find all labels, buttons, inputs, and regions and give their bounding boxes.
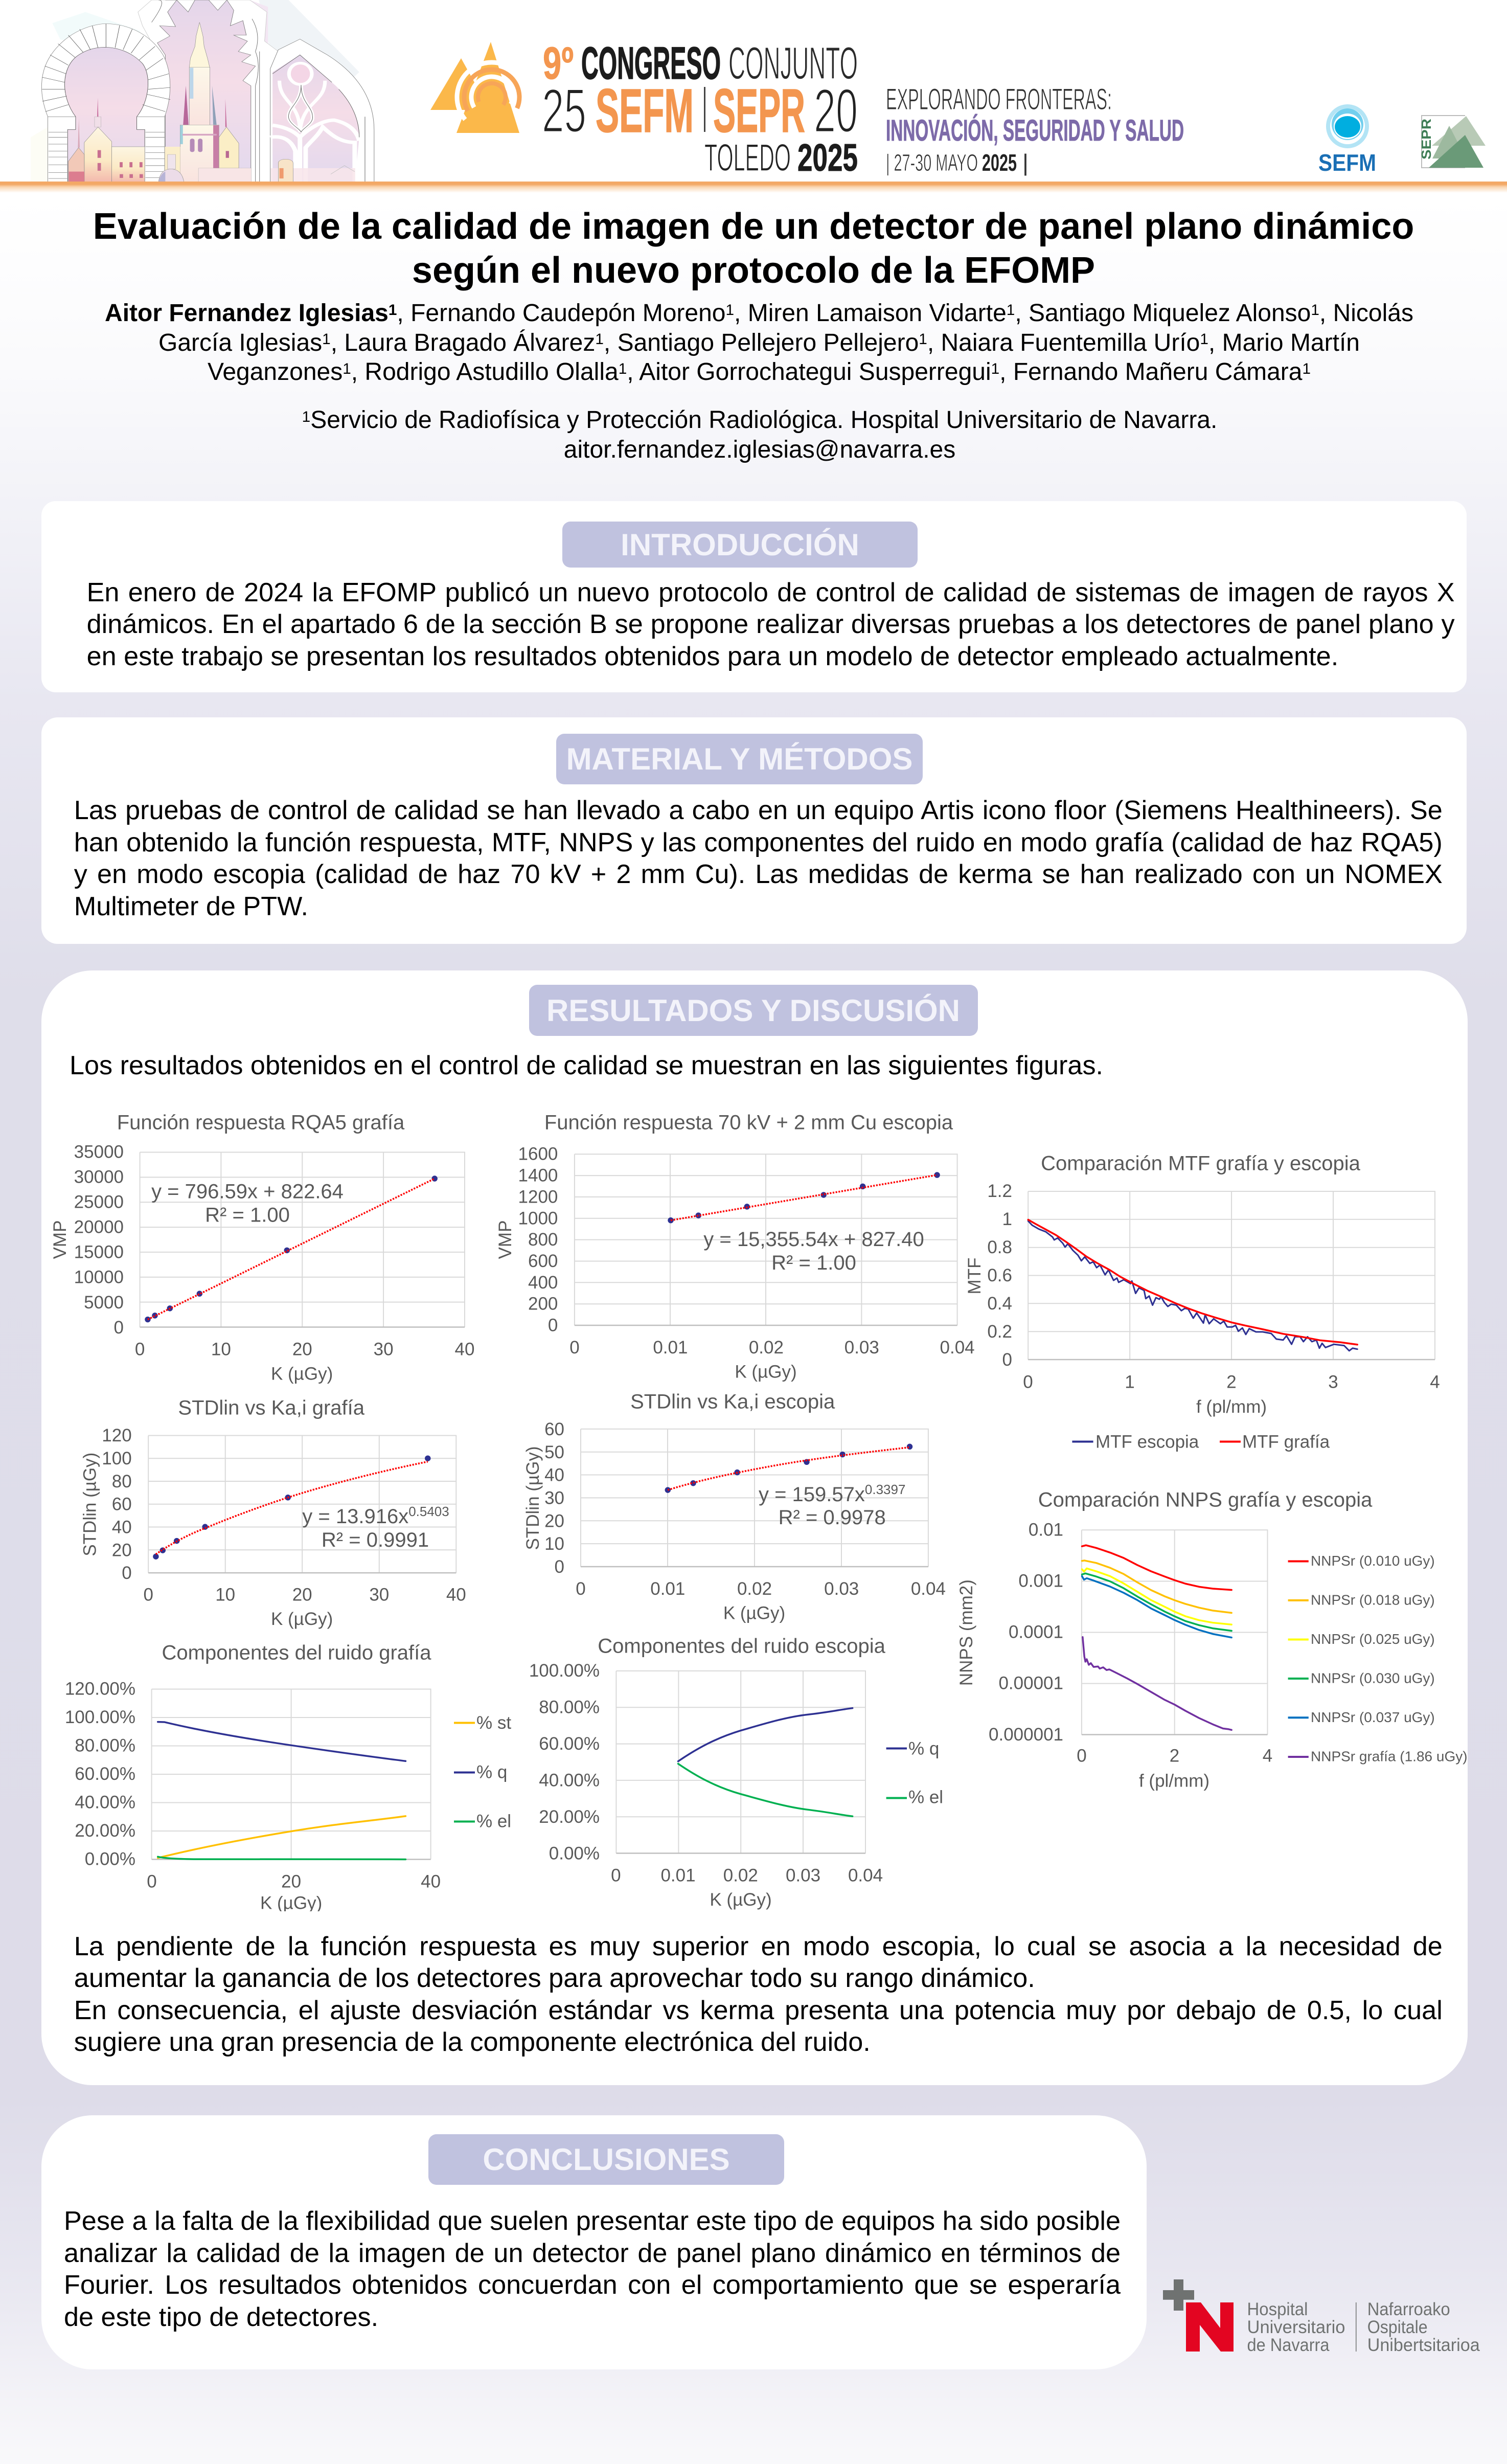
heading: conclusiones: CONCLUSIONES	[483, 2142, 730, 2177]
chart: Comparación NNPS grafía y escopia: f (pl/mm)	[1139, 1771, 1209, 1791]
chart: Función respuesta 70 kV + 2 mm Cu escopia: 1400	[518, 1165, 558, 1185]
chart: Función respuesta 70 kV + 2 mm Cu escopia: K (µGy)	[735, 1362, 797, 1382]
logo: Hospital Universitario de Navarra	[1163, 2279, 1480, 2355]
panel: conclusiones	[41, 2115, 1147, 2369]
chart: STDlin vs Ka,i escopia: 0.03	[824, 1578, 859, 1598]
text: material y métodos: Las pruebas de control de calidad se han llevado a cabo en un equipo Artis icono floor (Siemens Healthineers). Se	[74, 796, 1443, 825]
chart: STDlin vs Ka,i escopia: 50	[544, 1442, 564, 1462]
heading: introducción: INTRODUCCIÓN	[621, 528, 859, 562]
chart: STDlin vs Ka,i grafía: 0	[122, 1563, 132, 1583]
header banner	[0, 0, 1507, 192]
chart: STDlin vs Ka,i escopia: K (µGy)	[723, 1603, 785, 1623]
text: conclusiones: analizar la calidad de la imagen de un detector de panel plano dinámico en términos de	[64, 2239, 1121, 2268]
logo: Hospital Universitario de Navarra: Ospitale	[1367, 2317, 1428, 2337]
chart: Componentes del ruido grafía	[65, 1641, 511, 1913]
chart: Función respuesta 70 kV + 2 mm Cu escopia: VMP	[495, 1220, 515, 1259]
chart: STDlin vs Ka,i grafía: R² = 0.9991	[322, 1529, 429, 1551]
charts area	[50, 1111, 1468, 1911]
chart: Comparación NNPS grafía y escopia	[956, 1488, 1468, 1791]
chart: Función respuesta RQA5 grafía: 25000	[74, 1192, 124, 1212]
chart: STDlin vs Ka,i grafía: 20	[292, 1585, 312, 1604]
text: conclusiones: de este tipo de detectores.	[64, 2302, 378, 2332]
chart: STDlin vs Ka,i escopia: 40	[544, 1465, 564, 1485]
chart: STDlin vs Ka,i grafía: STDlin (µGy)	[80, 1452, 100, 1556]
orange header rule	[0, 182, 1507, 193]
chart: Comparación MTF grafía y escopia: Comparación MTF grafía y escopia	[1041, 1152, 1361, 1174]
chart: Función respuesta 70 kV + 2 mm Cu escopia: 600	[528, 1251, 558, 1271]
text: resultados discussion: sugiere una gran presencia de la componente electrónica del ruido.	[74, 2027, 871, 2057]
congress motto: INNOVACIÓN, SEGURIDAD Y SALUD	[886, 114, 1184, 147]
chart: Comparación MTF grafía y escopia: 0.6	[987, 1265, 1012, 1285]
congress motto: EXPLORANDO FRONTERAS:	[886, 83, 1112, 116]
text: material y métodos: Multimeter de PTW.	[74, 892, 308, 921]
chart: Comparación MTF grafía y escopia: MTF escopia	[1095, 1432, 1199, 1452]
logo: SEFM	[1318, 104, 1376, 176]
chart: Componentes del ruido escopia: 0.00%	[549, 1843, 600, 1863]
chart: STDlin vs Ka,i escopia: STDlin vs Ka,i escopia	[630, 1390, 835, 1413]
chart: STDlin vs Ka,i escopia: 60	[544, 1419, 564, 1439]
congress logo mark	[430, 42, 541, 146]
logo: Hospital Universitario de Navarra: Hospital	[1247, 2299, 1308, 2319]
chart: Comparación NNPS grafía y escopia: NNPSr (0.010 uGy)	[1311, 1553, 1435, 1569]
chart: STDlin vs Ka,i escopia: 0	[555, 1557, 564, 1577]
chart: STDlin vs Ka,i grafía: 30	[369, 1585, 389, 1604]
chart: Componentes del ruido grafía: % el	[476, 1811, 511, 1831]
authors: García Iglesias1, Laura Bragado Álvarez1, Santiago Pellejero Pellejero1, Naiara Fuentemilla Urío1, Mario Martín	[158, 329, 1360, 356]
authors: Aitor Fernandez Iglesias1, Fernando Caudepón Moreno1, Miren Lamaison Vidarte1, Santiago Miquelez Alonso1, Nicolás	[105, 300, 1413, 327]
text: material y métodos: han obtenido la función respuesta, MTF, NNPS y las componentes del ruido en modo grafía (calidad de haz RQA5)	[74, 828, 1443, 857]
authors: Veganzones1, Rodrigo Astudillo Olalla1, Aitor Gorrochategui Susperregui1, Fernando Mañeru Cámara1	[208, 358, 1311, 386]
chart: Comparación MTF grafía y escopia: MTF grafía	[1242, 1432, 1330, 1452]
chart: Componentes del ruido grafía: 0	[147, 1871, 157, 1891]
chart: Comparación NNPS grafía y escopia: 0.00001	[998, 1673, 1063, 1693]
chart: STDlin vs Ka,i grafía: 40	[446, 1585, 466, 1604]
chart: Componentes del ruido grafía: 0.00%	[85, 1849, 135, 1869]
chart: STDlin vs Ka,i escopia: y = 159.57x	[759, 1483, 865, 1505]
title: Evaluación de la calidad de imagen de un detector de panel plano dinámico	[93, 206, 1414, 247]
chart: Componentes del ruido grafía: 40.00%	[75, 1792, 135, 1812]
chart: Comparación MTF grafía y escopia: 3	[1328, 1372, 1338, 1392]
chart: STDlin vs Ka,i grafía: y = 13.916x	[302, 1505, 408, 1528]
chart: Comparación NNPS grafía y escopia: 0	[1077, 1746, 1087, 1766]
chart: STDlin vs Ka,i grafía: 120	[102, 1426, 132, 1445]
text: conclusiones	[64, 2206, 1121, 2332]
text: resultados discussion: aumentar la ganancia de los detectores para aprovechar todo su rango dinámico.	[74, 1963, 1035, 1993]
chart: Componentes del ruido escopia: 0.04	[848, 1865, 883, 1885]
chart: Componentes del ruido escopia: K (µGy)	[710, 1890, 772, 1909]
chart: Función respuesta RQA5 grafía: 30000	[74, 1167, 124, 1187]
text: conclusiones: Pese a la falta de la flexibilidad que suelen presentar este tipo de equipos ha sido posible	[64, 2206, 1121, 2236]
chart: Componentes del ruido grafía: 100.00%	[65, 1707, 135, 1727]
chart: STDlin vs Ka,i escopia: 0	[576, 1578, 586, 1598]
congress motto: 2025	[982, 149, 1017, 176]
chart: STDlin vs Ka,i escopia: STDlin (µGy)	[523, 1446, 543, 1550]
chart: Componentes del ruido escopia: 0.03	[786, 1865, 820, 1885]
chart: Componentes del ruido grafía: % q	[476, 1762, 507, 1782]
chart: Componentes del ruido escopia: 0.02	[723, 1865, 758, 1885]
chart: Comparación NNPS grafía y escopia: 0.000001	[989, 1725, 1063, 1745]
chart: Comparación MTF grafía y escopia: 0	[1002, 1350, 1012, 1370]
panel: material y métodos	[41, 717, 1467, 944]
chart: Comparación NNPS grafía y escopia: NNPSr (0.018 uGy)	[1311, 1592, 1435, 1608]
text: introducción: en este trabajo se presentan los resultados obtenidos para un modelo de detector empleado actualmente.	[87, 642, 1338, 671]
congress title text: 9º	[543, 37, 574, 88]
chart: Comparación MTF grafía y escopia: 1	[1002, 1209, 1012, 1229]
chart: STDlin vs Ka,i escopia: R² = 0.9978	[779, 1506, 886, 1529]
chart: Componentes del ruido escopia: % q	[908, 1738, 939, 1758]
logo: SEFM: SEFM	[1318, 149, 1376, 176]
logo: SEPR	[1419, 116, 1486, 168]
chart: Comparación NNPS grafía y escopia: NNPS (mm2)	[956, 1579, 976, 1686]
chart: Función respuesta RQA5 grafía: 20000	[74, 1217, 124, 1237]
chart: Componentes del ruido escopia: 100.00%	[529, 1661, 600, 1680]
text: resultados intro: Los resultados obtenidos en el control de calidad se muestran en las siguientes figuras.	[70, 1051, 1103, 1080]
text: resultados discussion	[74, 1932, 1443, 2057]
chart: STDlin vs Ka,i grafía: STDlin vs Ka,i grafía	[178, 1396, 365, 1419]
chart: Comparación MTF grafía y escopia: 4	[1430, 1372, 1440, 1392]
chart: Componentes del ruido grafía: 40	[421, 1871, 441, 1891]
chart: STDlin vs Ka,i escopia: 10	[544, 1534, 564, 1554]
chart: Función respuesta 70 kV + 2 mm Cu escopia: 0	[569, 1337, 580, 1357]
congress title text: SEPR	[713, 76, 805, 145]
congress title text: 25	[542, 76, 586, 145]
chart: Función respuesta RQA5 grafía	[50, 1111, 474, 1384]
text: conclusiones: Fourier. Los resultados obtenidos concuerdan con el comportamiento que se esperaría	[64, 2270, 1121, 2300]
chart: STDlin vs Ka,i escopia: 0.04	[911, 1578, 946, 1598]
chart: Comparación NNPS grafía y escopia: NNPSr (0.030 uGy)	[1311, 1670, 1435, 1686]
chart: Componentes del ruido grafía: 80.00%	[75, 1735, 135, 1755]
chart: Comparación NNPS grafía y escopia: 0.0001	[1009, 1622, 1063, 1642]
heading: resultados y discusión	[529, 985, 977, 1036]
chart: Componentes del ruido grafía: 20	[281, 1871, 301, 1891]
chart: Función respuesta RQA5 grafía: 0	[135, 1339, 145, 1359]
chart: STDlin vs Ka,i grafía: K (µGy)	[271, 1609, 333, 1629]
chart: Componentes del ruido escopia: % el	[908, 1787, 943, 1807]
chart: Comparación NNPS grafía y escopia: NNPSr (0.037 uGy)	[1311, 1709, 1435, 1725]
chart: Comparación MTF grafía y escopia: f (pl/mm)	[1196, 1397, 1267, 1416]
chart: Componentes del ruido escopia: 60.00%	[539, 1733, 600, 1754]
congress motto: |	[1022, 149, 1029, 176]
chart: STDlin vs Ka,i grafía: 40	[112, 1517, 132, 1537]
chart: Función respuesta RQA5 grafía: 0	[114, 1317, 124, 1338]
heading: resultados y discusión: RESULTADOS Y DISCUSIÓN	[546, 993, 960, 1028]
chart: Función respuesta 70 kV + 2 mm Cu escopia: 1200	[518, 1187, 558, 1207]
congress motto: | 27-30 MAYO	[886, 149, 978, 176]
congress title text: TOLEDO	[704, 136, 791, 179]
text: introducción	[87, 578, 1455, 671]
congress title text: CONGRESO	[581, 37, 721, 88]
chart: Comparación MTF grafía y escopia: 1	[1125, 1372, 1135, 1392]
chart: Comparación MTF grafía y escopia: MTF	[965, 1257, 985, 1294]
chart: Función respuesta RQA5 grafía: K (µGy)	[271, 1364, 333, 1384]
panel: introducción	[41, 501, 1467, 692]
chart: Comparación MTF grafía y escopia: 1.2	[987, 1181, 1012, 1201]
heading: material y métodos	[556, 734, 923, 784]
chart: Función respuesta RQA5 grafía: 10	[211, 1339, 231, 1359]
chart: Función respuesta 70 kV + 2 mm Cu escopia: 400	[528, 1272, 558, 1292]
chart: Función respuesta RQA5 grafía: 5000	[84, 1292, 124, 1312]
chart: Función respuesta 70 kV + 2 mm Cu escopia: 200	[528, 1294, 558, 1314]
chart: Función respuesta 70 kV + 2 mm Cu escopia	[495, 1111, 975, 1382]
chart: Comparación NNPS grafía y escopia: Comparación NNPS grafía y escopia	[1038, 1488, 1373, 1511]
congress title text	[542, 37, 858, 179]
chart: Componentes del ruido escopia	[529, 1635, 943, 1909]
chart: STDlin vs Ka,i escopia: 0.3397	[865, 1481, 905, 1497]
chart: Función respuesta 70 kV + 2 mm Cu escopia: 800	[528, 1230, 558, 1250]
chart: Comparación MTF grafía y escopia: 0.2	[987, 1322, 1012, 1342]
chart: Componentes del ruido escopia: Componentes del ruido escopia	[598, 1635, 886, 1657]
chart: STDlin vs Ka,i grafía: 20	[112, 1540, 132, 1560]
title	[93, 206, 1414, 291]
logo: SEPR: SEPR	[1419, 119, 1434, 160]
chart: Función respuesta RQA5 grafía: 10000	[74, 1267, 124, 1287]
authors	[105, 300, 1413, 386]
chart: Componentes del ruido escopia: 20.00%	[539, 1807, 600, 1826]
chart: Componentes del ruido grafía: Componentes del ruido grafía	[162, 1641, 431, 1664]
chart: Comparación MTF grafía y escopia	[965, 1152, 1440, 1452]
chart: Función respuesta 70 kV + 2 mm Cu escopia: 0.01	[653, 1337, 688, 1357]
congress title text: SEFM	[596, 76, 694, 145]
text: resultados discussion: La pendiente de la función respuesta es muy superior en modo escopia, lo cual se asocia a la necesidad de	[74, 1932, 1443, 1961]
chart: STDlin vs Ka,i grafía: 100	[102, 1448, 132, 1468]
chart: Comparación MTF grafía y escopia: 0	[1023, 1372, 1033, 1392]
chart: Función respuesta RQA5 grafía: 35000	[74, 1142, 124, 1162]
title: según el nuevo protocolo de la EFOMP	[412, 250, 1095, 291]
chart: STDlin vs Ka,i escopia: 30	[544, 1488, 564, 1508]
chart: STDlin vs Ka,i escopia: 0.02	[737, 1578, 772, 1598]
congress motto	[886, 83, 1184, 176]
chart: Componentes del ruido grafía: % st	[476, 1713, 511, 1732]
chart: Función respuesta RQA5 grafía: y = 796.59x + 822.64	[151, 1180, 344, 1203]
chart: Función respuesta 70 kV + 2 mm Cu escopia: R² = 1.00	[771, 1252, 856, 1274]
chart: Función respuesta 70 kV + 2 mm Cu escopia: 0.04	[940, 1337, 975, 1357]
chart: Componentes del ruido grafía: 120.00%	[65, 1679, 135, 1699]
text: material y métodos	[74, 796, 1443, 921]
chart: Función respuesta 70 kV + 2 mm Cu escopia: 0.02	[749, 1337, 784, 1357]
chart: Función respuesta RQA5 grafía: 40	[455, 1339, 474, 1359]
chart: STDlin vs Ka,i grafía: 80	[112, 1471, 132, 1491]
chart: STDlin vs Ka,i escopia	[523, 1390, 946, 1623]
heading: conclusiones	[428, 2134, 784, 2185]
chart: Función respuesta RQA5 grafía: 15000	[74, 1242, 124, 1262]
chart: Comparación MTF grafía y escopia: 2	[1226, 1372, 1237, 1392]
chart: Comparación NNPS grafía y escopia: 0.001	[1018, 1571, 1063, 1591]
chart: Comparación MTF grafía y escopia: 0.4	[987, 1294, 1012, 1314]
chart: STDlin vs Ka,i escopia: 0.01	[650, 1578, 685, 1598]
logo: Hospital Universitario de Navarra: Universitario	[1247, 2317, 1345, 2337]
chart: Componentes del ruido grafía: 60.00%	[75, 1764, 135, 1783]
chart: STDlin vs Ka,i grafía	[80, 1396, 466, 1629]
illustration: Toledo arches and skyline	[31, 0, 374, 183]
text: material y métodos: y en modo escopia (calidad de haz 70 kV + 2 mm Cu). Las medidas de kerma se han realizado con un NOMEX	[74, 860, 1443, 889]
text: introducción: dinámicos. En el apartado 6 de la sección B se propone realizar diversas pruebas a los detectores de panel plano y	[87, 609, 1455, 639]
chart: Componentes del ruido escopia: 80.00%	[539, 1697, 600, 1717]
chart: STDlin vs Ka,i grafía: 0	[143, 1585, 153, 1604]
chart: Función respuesta 70 kV + 2 mm Cu escopia: 0.03	[844, 1337, 879, 1357]
affiliation: aitor.fernandez.iglesias@navarra.es	[564, 436, 955, 463]
logo: Hospital Universitario de Navarra: de Navarra	[1247, 2335, 1330, 2355]
chart: Componentes del ruido escopia: 0	[611, 1865, 621, 1885]
affiliation	[302, 406, 1217, 463]
congress title text: 2025	[797, 136, 858, 179]
chart: Función respuesta RQA5 grafía: 20	[292, 1339, 312, 1359]
chart: Componentes del ruido escopia: 0.01	[660, 1865, 696, 1885]
panel: resultados y discusión	[41, 970, 1468, 2085]
chart: STDlin vs Ka,i grafía: 60	[112, 1494, 132, 1514]
text: resultados discussion: En consecuencia, el ajuste desviación estándar vs kerma presenta una potencia muy por debajo de 0.5, lo cual	[74, 1996, 1443, 2025]
chart: Comparación NNPS grafía y escopia: NNPSr (0.025 uGy)	[1311, 1631, 1435, 1647]
congress title text: CONJUNTO	[728, 37, 858, 88]
chart: Función respuesta 70 kV + 2 mm Cu escopia: 0	[548, 1315, 558, 1335]
chart: Componentes del ruido grafía: 20.00%	[75, 1820, 135, 1841]
chart: Comparación NNPS grafía y escopia: NNPSr grafía (1.86 uGy)	[1311, 1748, 1468, 1764]
chart: Función respuesta RQA5 grafía: VMP	[50, 1220, 70, 1259]
chart: Función respuesta RQA5 grafía: 30	[374, 1339, 394, 1359]
chart: STDlin vs Ka,i grafía: 0.5403	[408, 1504, 449, 1519]
logo: Hospital Universitario de Navarra: Unibertsitarioa	[1367, 2335, 1480, 2355]
chart: Comparación NNPS grafía y escopia: 2	[1170, 1746, 1179, 1766]
chart: Función respuesta RQA5 grafía: R² = 1.00	[205, 1204, 290, 1226]
chart: Función respuesta 70 kV + 2 mm Cu escopia: y = 15,355.54x + 827.40	[703, 1228, 924, 1251]
chart: STDlin vs Ka,i escopia: 20	[544, 1511, 564, 1531]
chart: Función respuesta RQA5 grafía: Función respuesta RQA5 grafía	[117, 1111, 405, 1134]
chart: Comparación MTF grafía y escopia: 0.8	[987, 1237, 1012, 1257]
chart: Comparación NNPS grafía y escopia: 4	[1263, 1746, 1272, 1766]
chart: Componentes del ruido escopia: 40.00%	[539, 1770, 600, 1790]
logo: Hospital Universitario de Navarra: Nafarroako	[1367, 2299, 1450, 2319]
text: introducción: En enero de 2024 la EFOMP publicó un nuevo protocolo de control de calidad de sistemas de imagen de rayos X	[87, 578, 1455, 607]
affiliation: 1Servicio de Radiofísica y Protección Radiológica. Hospital Universitario de Navarra.	[302, 406, 1217, 434]
chart: Función respuesta 70 kV + 2 mm Cu escopia: 1600	[518, 1144, 558, 1164]
chart: Comparación NNPS grafía y escopia: 0.01	[1029, 1520, 1063, 1540]
heading: introducción	[562, 522, 918, 568]
heading: material y métodos: MATERIAL Y MÉTODOS	[566, 742, 912, 776]
chart: STDlin vs Ka,i grafía: 10	[215, 1585, 235, 1604]
chart: Función respuesta 70 kV + 2 mm Cu escopia: 1000	[518, 1208, 558, 1228]
congress title text: 20	[814, 76, 858, 145]
chart: Función respuesta 70 kV + 2 mm Cu escopia: Función respuesta 70 kV + 2 mm Cu escopia	[544, 1111, 953, 1134]
